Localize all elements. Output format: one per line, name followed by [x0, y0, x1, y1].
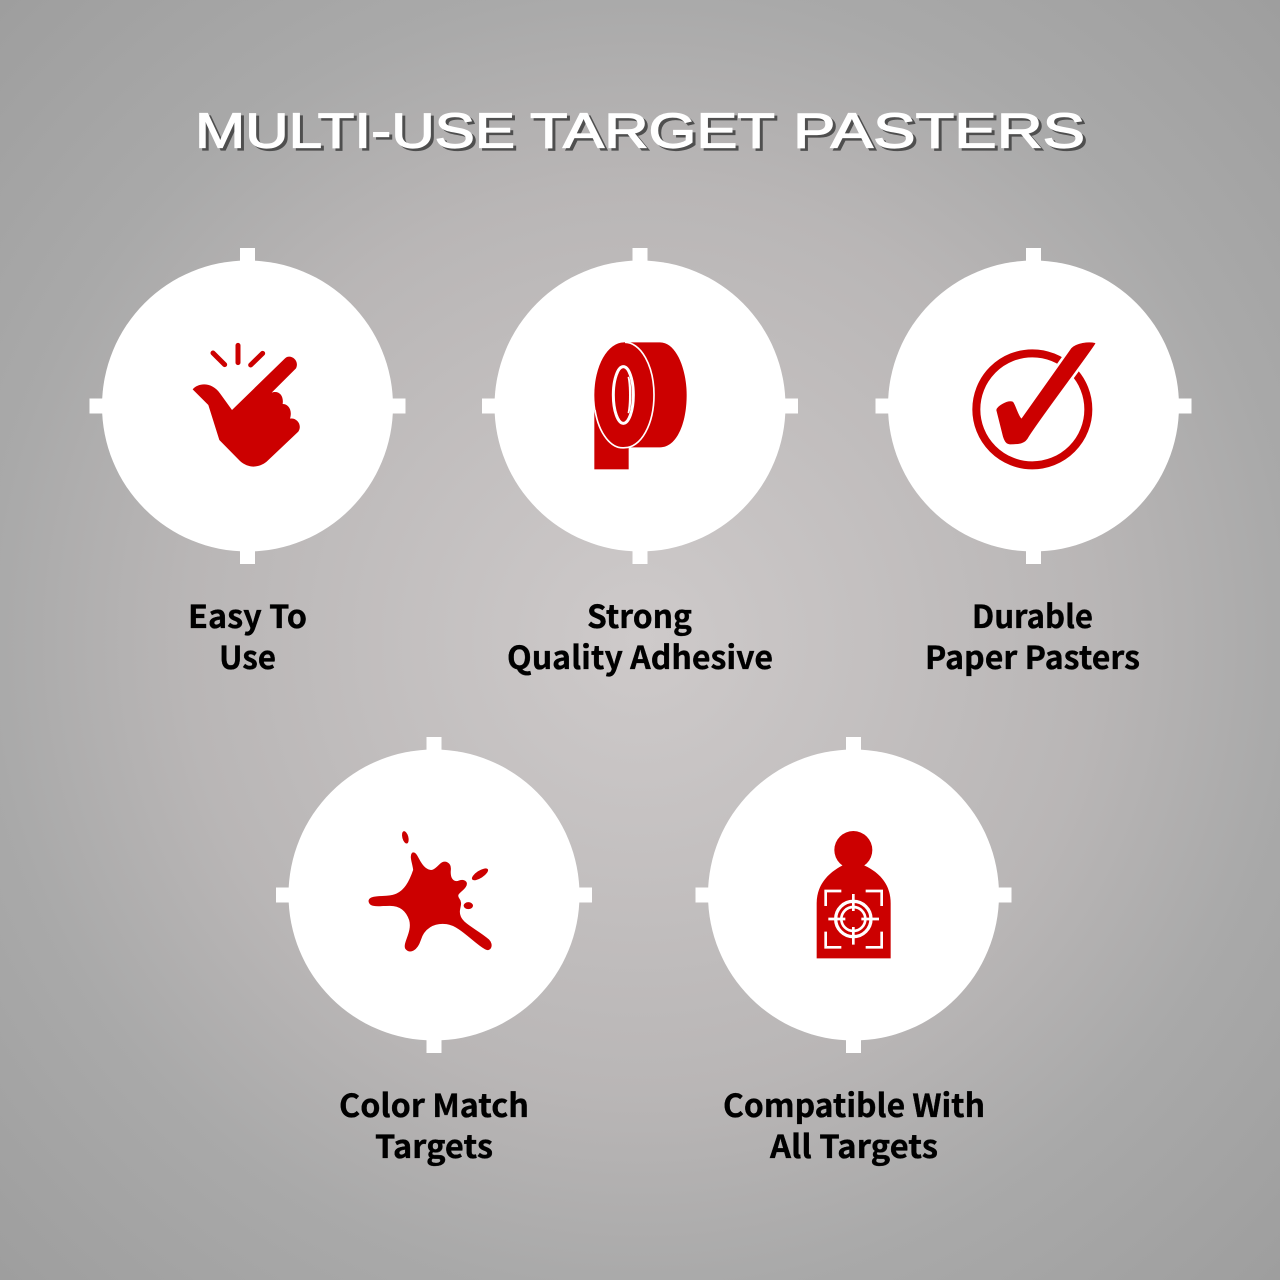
label: compatible with all targets: [723, 1081, 985, 1168]
title: PASTERS: [796, 107, 1088, 161]
label: easy to use: Use: [219, 633, 276, 679]
icon: snapping fingers hand: [193, 345, 300, 467]
label: color match targets: [339, 1081, 529, 1168]
icon: tape roll: [594, 342, 687, 469]
title: [195, 104, 1088, 161]
crosshair disc: easy to use: [90, 248, 406, 564]
title: TARGET: [530, 104, 775, 158]
icon: check mark in circle: [976, 343, 1095, 465]
label: color match targets: Targets: [375, 1122, 493, 1168]
panel: strong quality adhesive: [482, 248, 798, 679]
label: compatible with all targets: All Targets: [769, 1122, 938, 1168]
label: color match targets: Color Match: [339, 1081, 529, 1127]
crosshair disc: strong quality adhesive: [482, 248, 798, 564]
title: MULTI-USE: [198, 107, 518, 161]
title: PASTERS: [793, 104, 1085, 158]
label: strong quality adhesive: Strong: [587, 592, 692, 638]
crosshair disc: color match targets: [276, 737, 592, 1053]
crosshair disc: durable paper pasters: [876, 248, 1192, 564]
label: strong quality adhesive: [507, 592, 773, 679]
label: compatible with all targets: Compatible With: [723, 1081, 985, 1127]
label: durable paper pasters: Paper Pasters: [925, 633, 1140, 679]
icon: red splatter: [369, 830, 491, 951]
panel: easy to use: [90, 248, 406, 679]
crosshair disc: compatible with all targets: [696, 737, 1012, 1053]
label: easy to use: Easy To: [188, 592, 307, 638]
icon: silhouette target with reticle: [817, 831, 891, 958]
label: strong quality adhesive: Quality Adhesive: [507, 633, 773, 679]
label: durable paper pasters: [925, 592, 1140, 679]
title: MULTI-USE: [195, 104, 515, 158]
label: durable paper pasters: Durable: [972, 592, 1093, 638]
panel: compatible with all targets: [696, 737, 1012, 1168]
title: TARGET: [533, 107, 778, 161]
panel: durable paper pasters: [876, 248, 1192, 679]
label: easy to use: [188, 592, 307, 679]
panel: color match targets: [276, 737, 592, 1168]
